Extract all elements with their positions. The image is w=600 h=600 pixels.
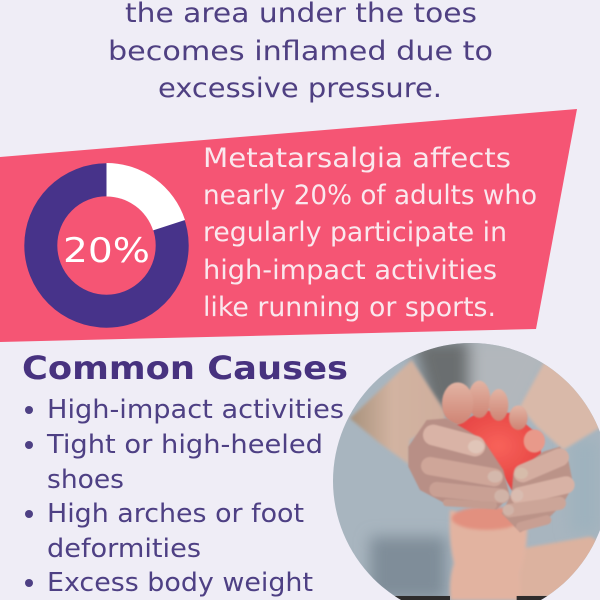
- statistic text: like running or sports.: [203, 292, 496, 323]
- inflamed ball of foot: [456, 410, 542, 490]
- statistic text: [203, 143, 537, 323]
- sole of foot: [450, 507, 527, 600]
- other foot: [515, 537, 600, 598]
- statistic text: high-impact activities: [203, 255, 497, 286]
- statistic banner: [0, 109, 577, 342]
- list of causes: Tight or high-heeled: [46, 430, 323, 460]
- donut chart: 20%: 20%: [63, 231, 150, 271]
- list of causes: [25, 395, 344, 598]
- list of causes: deformities: [47, 534, 201, 564]
- photo: hands holding painful foot: [330, 340, 600, 600]
- list of causes: shoes: [47, 465, 124, 495]
- intro text: [108, 0, 493, 104]
- list of causes: High arches or foot: [47, 499, 304, 529]
- toes: [442, 381, 545, 453]
- statistic text: regularly participate in: [203, 217, 507, 248]
- heading: Common Causes: Common Causes: [22, 349, 348, 387]
- arms: [350, 355, 600, 465]
- intro text: becomes inflamed due to: [108, 36, 493, 67]
- hands: [408, 418, 573, 532]
- statistic text: nearly 20% of adults who: [203, 180, 537, 211]
- intro text: excessive pressure.: [158, 73, 442, 104]
- floor shadow: [394, 596, 450, 600]
- list of causes: High-impact activities: [47, 395, 344, 425]
- statistic text: Metatarsalgia affects: [203, 143, 511, 174]
- list of causes: Excess body weight: [47, 568, 313, 598]
- donut chart: 20%: [41, 163, 185, 311]
- clothing tones: [370, 340, 600, 600]
